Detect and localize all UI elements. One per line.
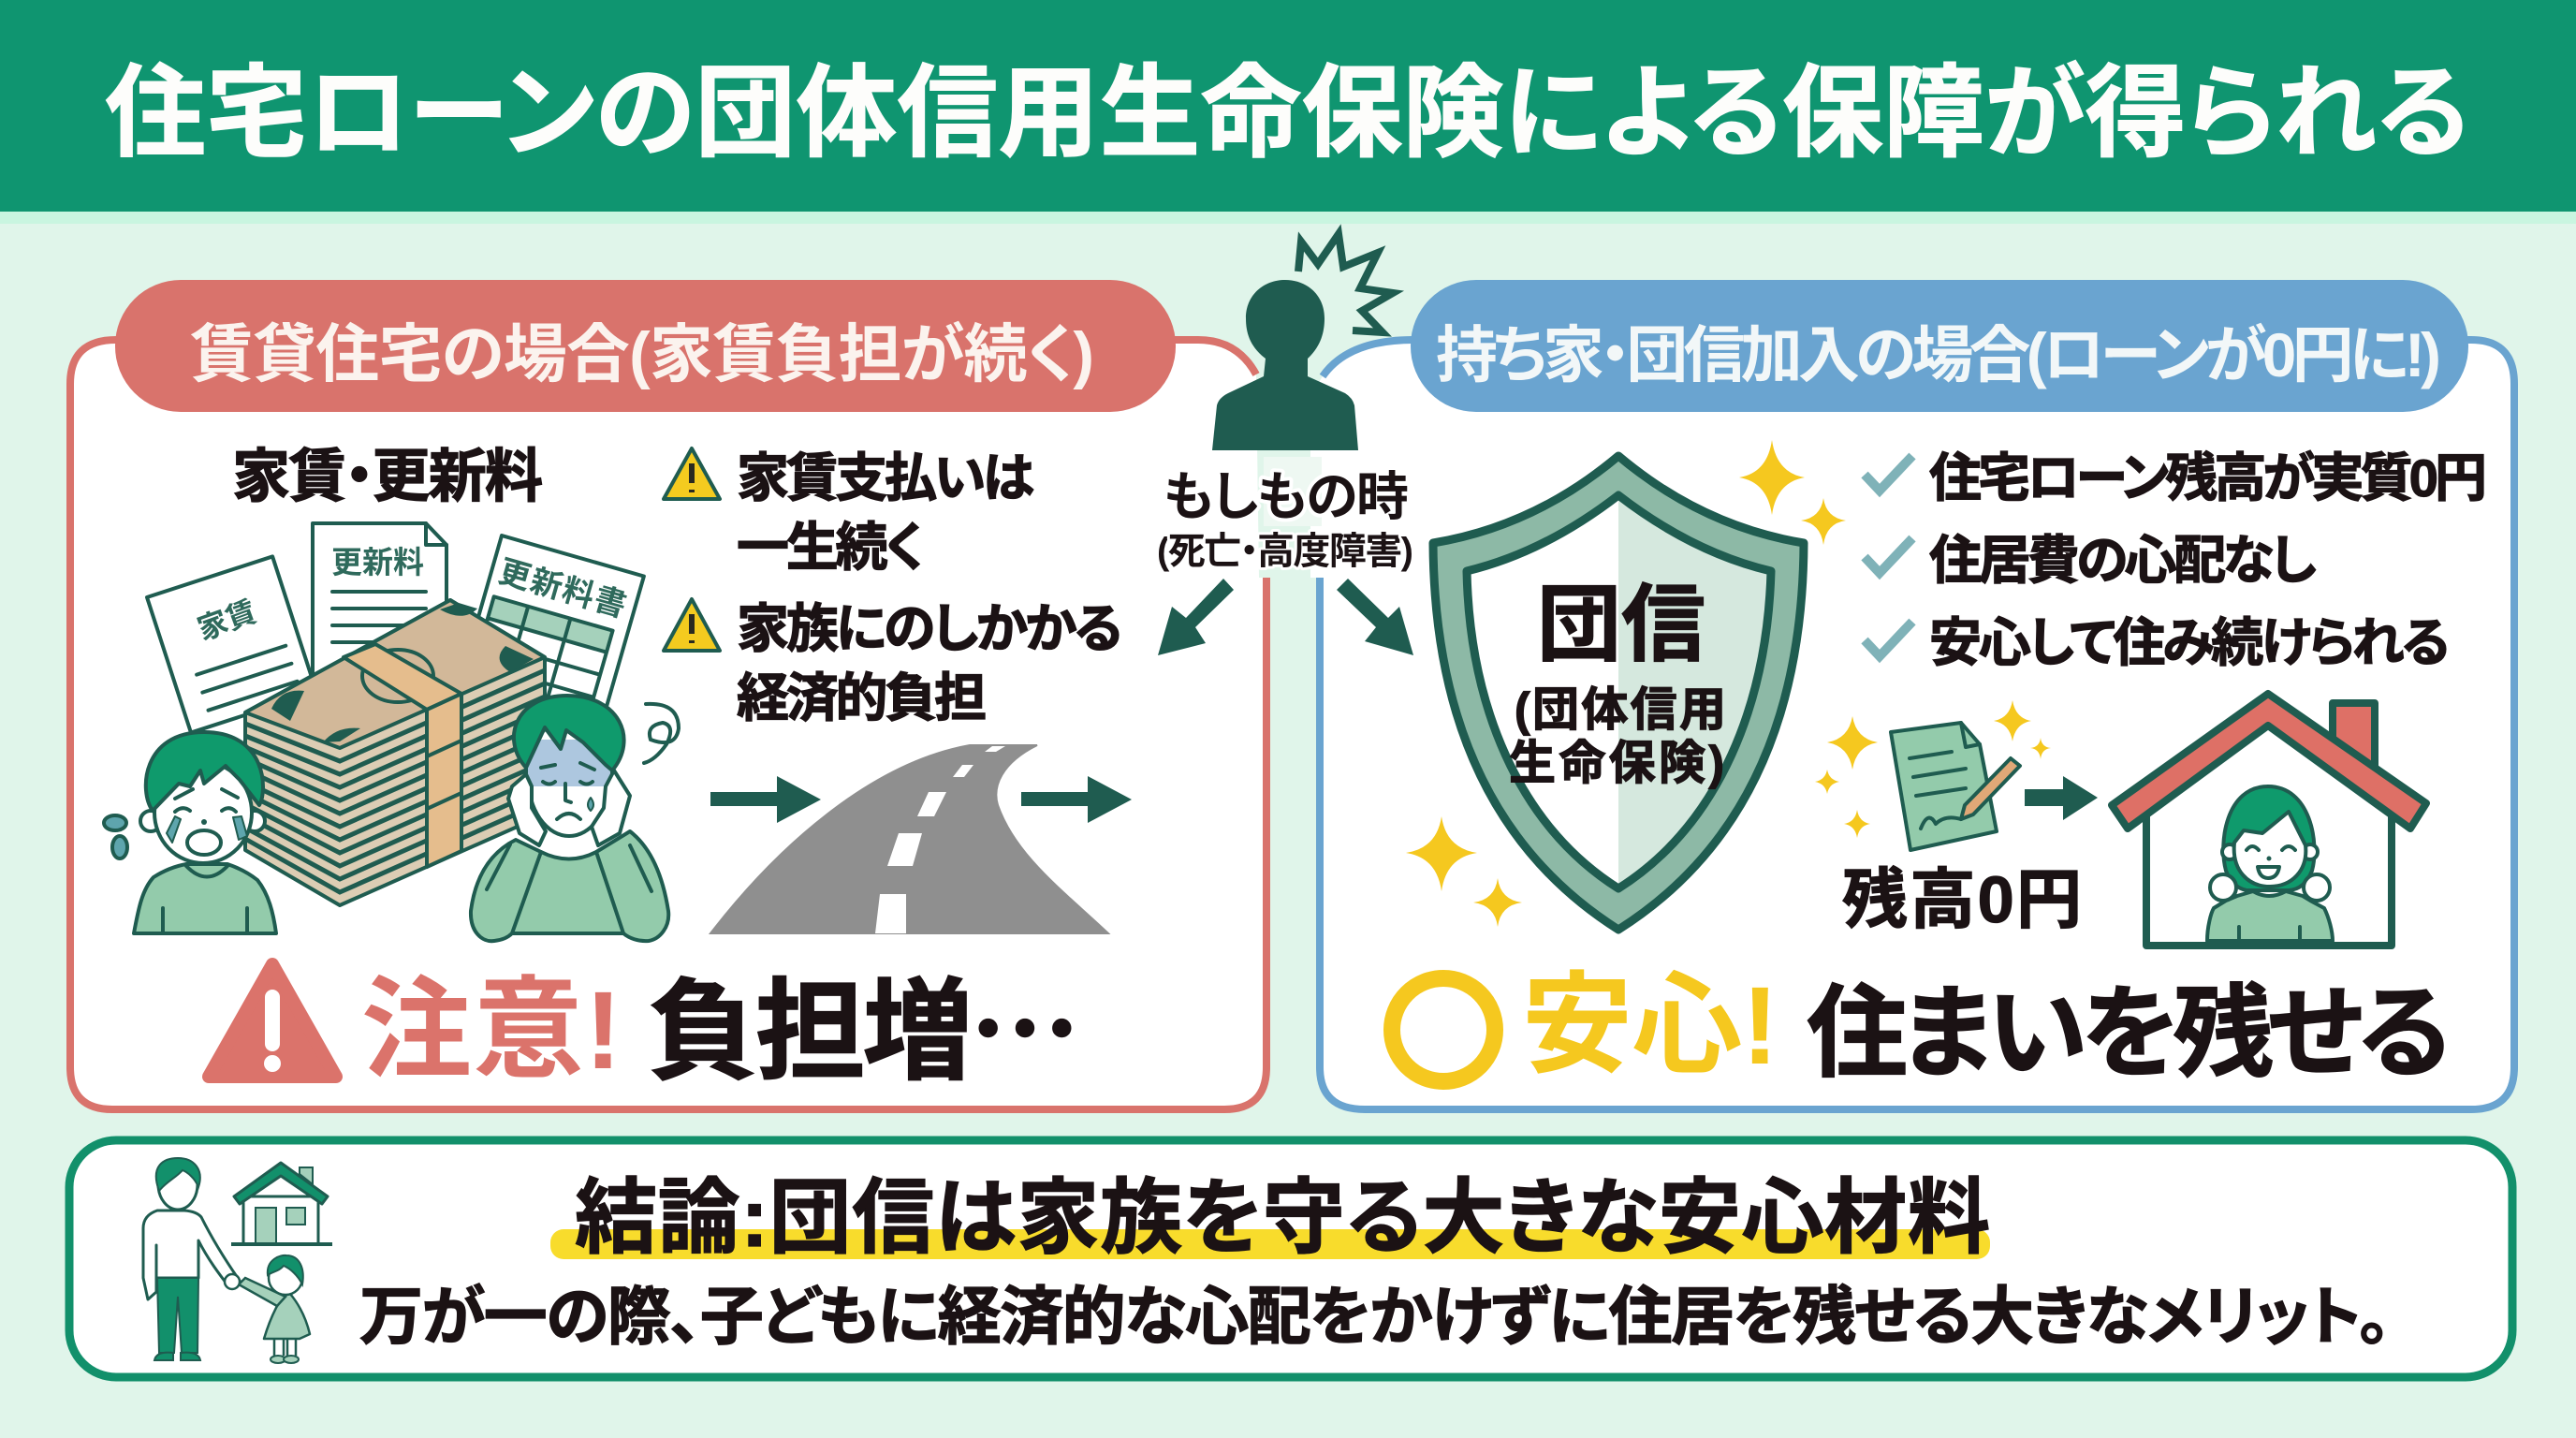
center: emergency: [1157, 234, 1413, 655]
document: renewal fee: 更新料: [331, 545, 424, 580]
panel: conclusion: [69, 1140, 2512, 1377]
header banner: [0, 0, 2576, 212]
panel heading pill: owner: 持ち家・団信加入の場合(ローンが0円に!): [1436, 320, 2441, 389]
arrow: out of road: [1021, 776, 1132, 823]
title: 住宅ローンの団体信用生命保険による保障が得られる: [105, 56, 2469, 169]
icon: person silhouette: [1212, 280, 1358, 450]
warning item 1: [664, 448, 1034, 577]
icon: paid-off document and pen: [1891, 723, 2020, 850]
check item 3: 安心して住み続けられる: [1929, 613, 2450, 672]
callout: peace of mind: [1392, 964, 2451, 1090]
icon: warning triangle: [664, 599, 720, 651]
central connector block: [1264, 457, 1322, 526]
document: rent: [147, 556, 316, 733]
illustration: parent, child and house: [143, 1158, 332, 1363]
text: group credit life insurance: (団体信用: [1515, 683, 1726, 736]
panel heading pill: rental: [115, 280, 1176, 412]
person: smiling woman: [2207, 786, 2333, 941]
illustration: stack of banknotes: [245, 600, 545, 905]
text: family financial burden: 家族にのしかかる: [737, 599, 1122, 658]
text: family financial burden: 経済的負担: [737, 668, 987, 727]
illustration: shield: [1433, 456, 1804, 930]
icon: shock burst: [1298, 234, 1393, 332]
icon: tear drops: [104, 815, 127, 858]
document: rent: 家賃: [193, 594, 261, 647]
illustration: documents: [147, 523, 644, 747]
text: peace of mind: 安心!: [1522, 964, 1778, 1088]
text: burden increases: 負担増…: [648, 942, 1080, 1102]
text: group credit life insurance: 生命保険): [1509, 737, 1724, 789]
illustration: crying child: [134, 732, 276, 933]
panel: home owner with group credit insurance: [1310, 280, 2514, 1109]
conclusion body: 万が一の際、子どもに経済的な心配をかけずに住居を残せる大きなメリット。: [359, 1282, 2391, 1353]
icon: check marks: [1865, 456, 1912, 656]
panel frame: conclusion: [69, 1140, 2512, 1377]
arrow: to owner: [1337, 579, 1413, 655]
icon: dizzy spiral: [644, 704, 679, 763]
panel frame: owner: [1310, 340, 2514, 1109]
text: rent lasts a lifetime: 一生続く: [737, 518, 924, 577]
icon: small house: [231, 1163, 332, 1244]
document: renewal fee statement: 更新料書: [494, 554, 630, 624]
text: dantai shin: 団信: [1537, 579, 1705, 672]
person: father: [143, 1158, 240, 1360]
document: renewal fee statement: [453, 536, 644, 747]
person: child: [225, 1255, 310, 1363]
document: renewal fee: [313, 523, 446, 688]
label: rent and renewal fee: 家賃・更新料: [232, 445, 543, 509]
panel heading pill: owner: [1411, 280, 2468, 412]
illustration: house with smiling person: [2112, 694, 2426, 946]
label: emergency: もしもの時: [1164, 467, 1409, 526]
highlight under heading: [550, 1229, 1990, 1259]
arrow: to rental: [1158, 579, 1234, 655]
panel: rental housing: [70, 280, 1266, 1109]
check item 1: 住宅ローン残高が実質0円: [1929, 448, 2487, 507]
illustration: worried adult: [471, 696, 668, 941]
warning item 2: [664, 599, 1122, 727]
icon: sparkles around shield: [1406, 440, 1846, 927]
panel heading pill: rental: 賃貸住宅の場合(家賃負担が続く): [190, 319, 1094, 390]
callout: caution burden increases: [209, 942, 1080, 1102]
panel frame: rental: [70, 340, 1266, 1109]
conclusion heading: 結論:団信は家族を守る大きな安心材料: [575, 1171, 1990, 1264]
checklist: [1865, 448, 2487, 672]
arrow: document to house: [2025, 776, 2098, 820]
label: balance zero: 残高0円: [1842, 863, 2082, 936]
illustration: long road: [710, 745, 1108, 933]
text: can keep the home: 住まいを残せる: [1807, 976, 2451, 1090]
icon: caution triangle: [209, 964, 336, 1077]
label: death or severe disability: (死亡・高度障害): [1157, 531, 1413, 572]
icon: circle mark: [1392, 978, 1495, 1081]
icon: warning triangle: [664, 448, 720, 499]
icon: sparkles around document: [1815, 700, 2051, 838]
text: caution: 注意!: [361, 969, 622, 1093]
text: rent lasts a lifetime: 家賃支払いは: [737, 448, 1034, 507]
check item 2: 住居費の心配なし: [1929, 531, 2317, 590]
arrow: into road: [710, 776, 821, 823]
